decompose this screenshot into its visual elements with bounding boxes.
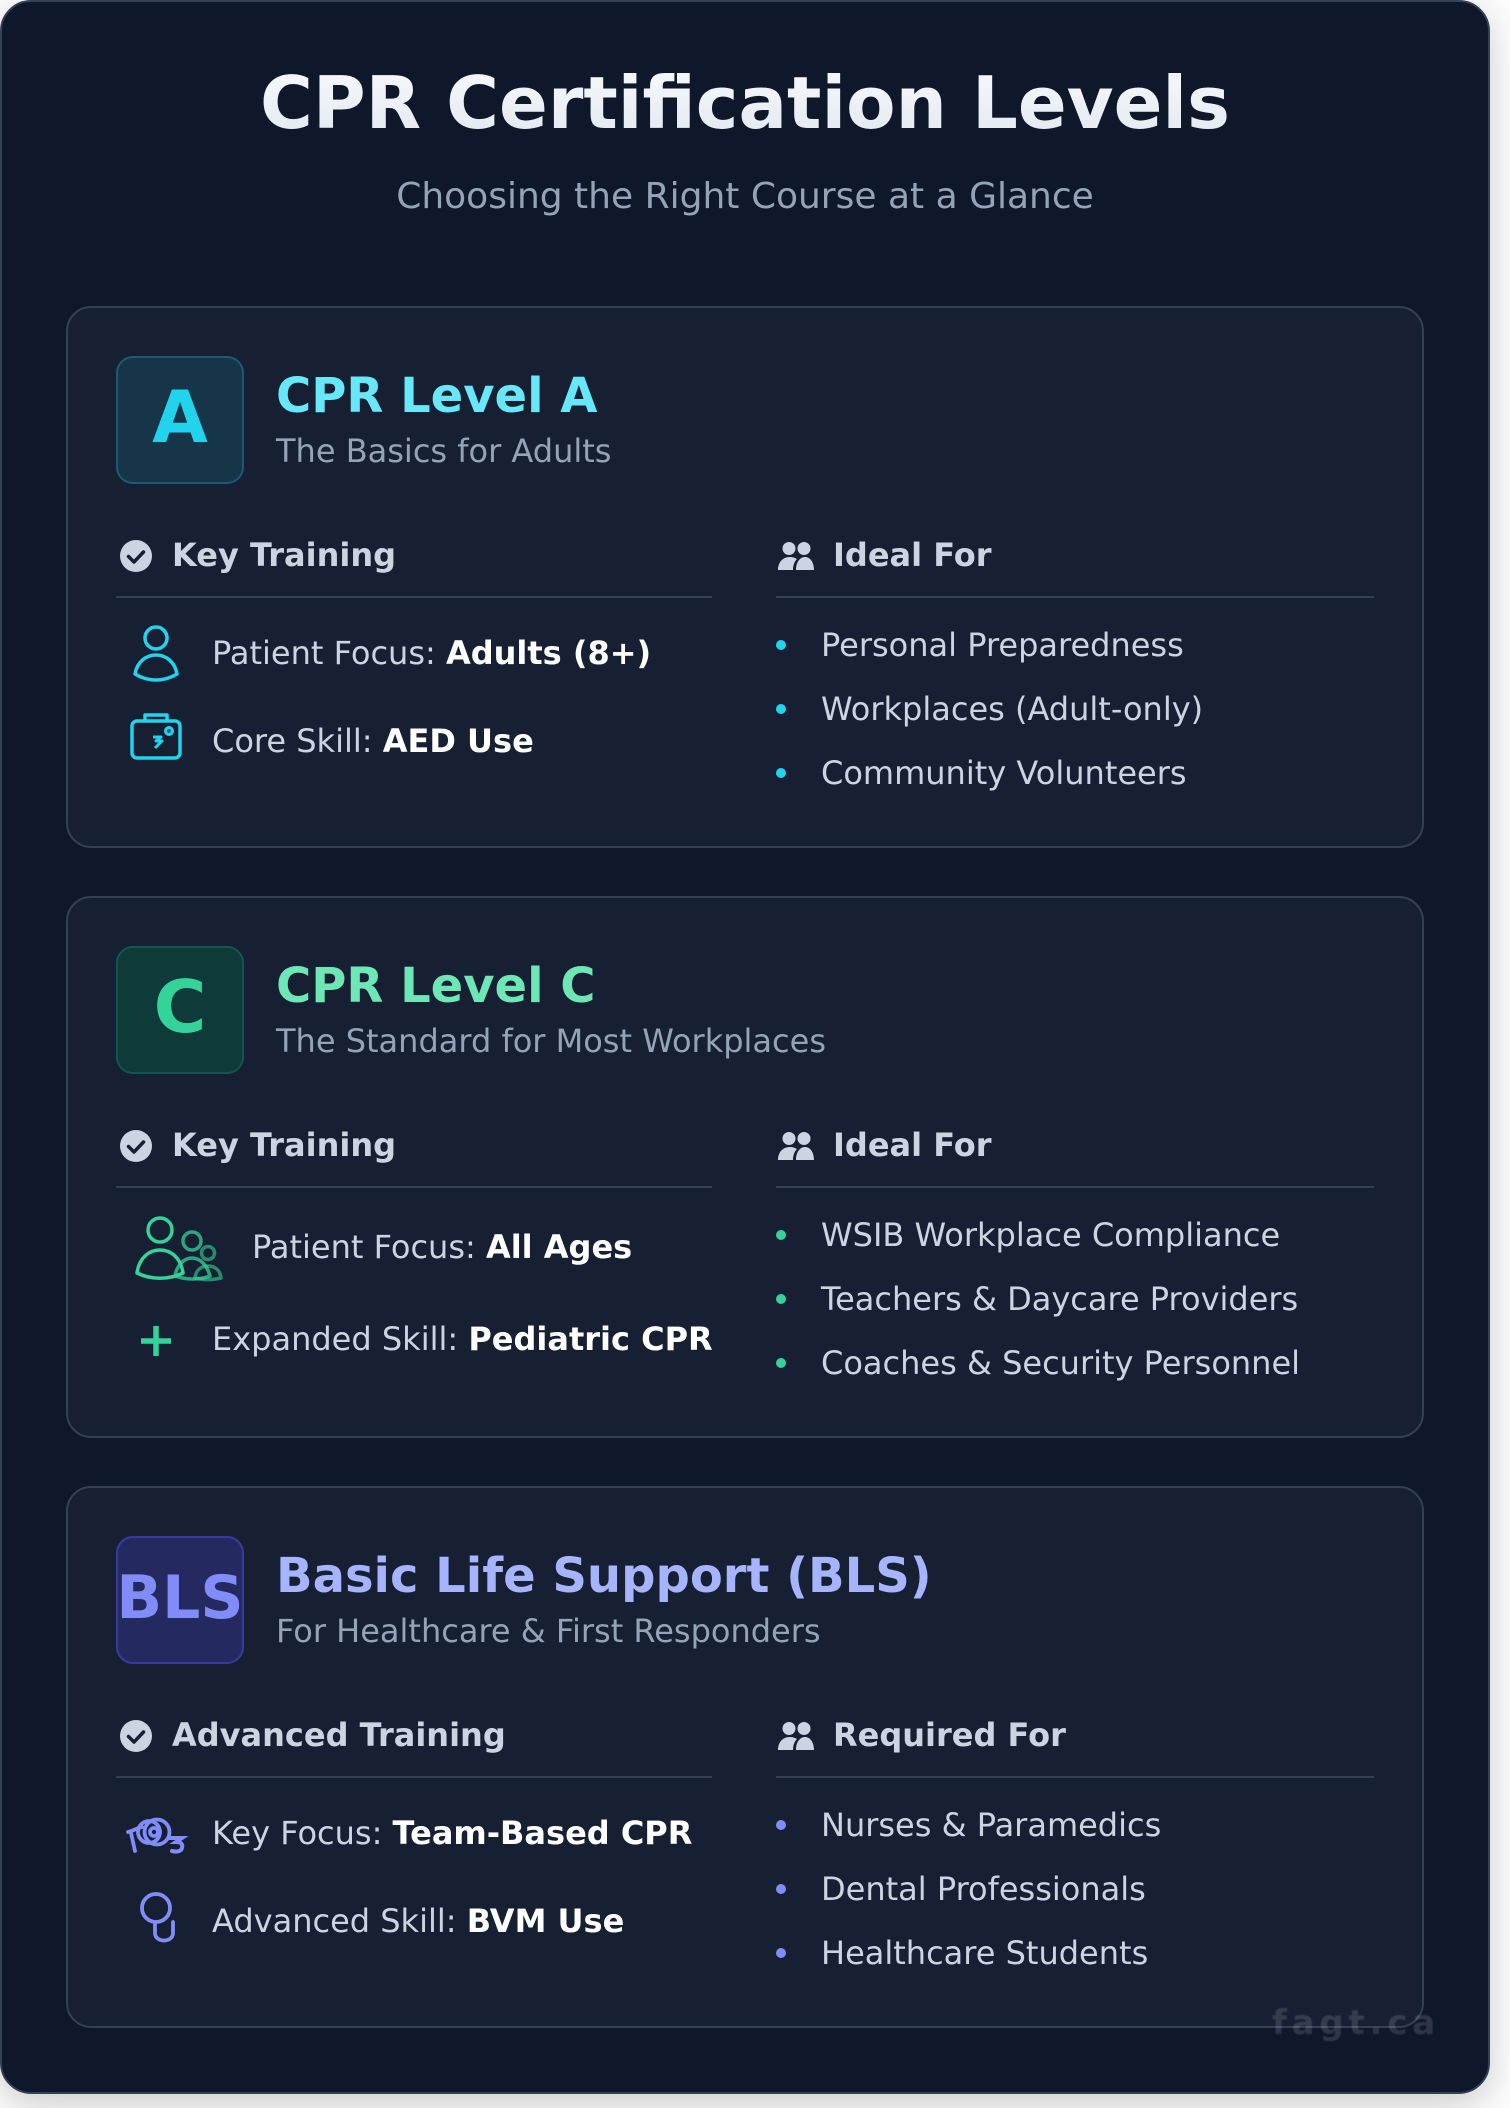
icon: people [778,1132,814,1160]
list: required for: Healthcare Students [821,1934,1148,1972]
subheading: The Standard for Most Workplaces [275,1022,826,1060]
panel: CPR Level C [67,897,1423,1437]
list: ideal for [776,1216,1300,1382]
badge: C [117,947,243,1073]
heading: CPR Level C: CPR Level C [276,958,595,1014]
panel: Basic Life Support [67,1487,1423,2027]
icon: people [778,1722,814,1750]
heading: Ideal For: Ideal For [833,1126,992,1164]
icon: bag valve mask [142,1894,173,1940]
text: expanded skill: Expanded Skill: Pediatric CPR [212,1320,713,1358]
icon: adult person [135,627,177,680]
list: required for: Dental Professionals [821,1870,1146,1908]
text: key focus: Key Focus: Team-Based CPR [212,1814,692,1852]
icon: check circle [120,1720,152,1752]
list: ideal for: Workplaces (Adult-only) [821,690,1203,728]
text: patient focus: Patient Focus: All Ages [252,1228,632,1266]
badge: A: A [152,375,208,459]
list: ideal for [776,626,1203,792]
badge: C: C [154,965,206,1049]
text: core skill: Core Skill: AED Use [212,722,534,760]
icon: check circle [120,540,152,572]
list: ideal for: Personal Preparedness [821,626,1184,664]
heading: CPR Level A: CPR Level A [276,368,597,424]
text: patient focus: Patient Focus: Adults (8+) [212,634,651,672]
subtitle: Choosing the Right Course at a Glance [396,176,1094,217]
heading: Required For: Required For [833,1716,1066,1754]
icon: plus [141,1326,171,1356]
list: ideal for: Coaches & Security Personnel [821,1344,1300,1382]
icon: AED case [132,715,180,758]
badge: BLS: BLS [116,1563,244,1633]
icon: people [778,542,814,570]
subheading: For Healthcare & First Responders [276,1612,821,1650]
title: CPR Certification Levels [260,61,1230,145]
badge: BLS [116,1537,244,1663]
list: required for [776,1806,1161,1972]
list: required for: Nurses & Paramedics [821,1806,1161,1844]
watermark: fagt.ca [1272,2003,1440,2043]
heading: Advanced Training: Advanced Training [172,1716,506,1754]
icon: team [128,1820,182,1852]
heading: Ideal For: Ideal For [833,536,992,574]
icon: family all ages [137,1218,221,1280]
heading: Key Training: Key Training [172,1126,396,1164]
text: advanced skill: Advanced Skill: BVM Use [212,1902,624,1940]
heading: Basic Life Support: Basic Life Support (BLS) [276,1548,932,1604]
icon: check circle [120,1130,152,1162]
badge: A [117,357,243,483]
heading: Key Training: Key Training [172,536,396,574]
panel: CPR Level A [67,307,1423,847]
list: ideal for: Community Volunteers [821,754,1187,792]
subheading: The Basics for Adults [275,432,611,470]
list: ideal for: Teachers & Daycare Providers [820,1280,1298,1318]
list: ideal for: WSIB Workplace Compliance [821,1216,1280,1254]
